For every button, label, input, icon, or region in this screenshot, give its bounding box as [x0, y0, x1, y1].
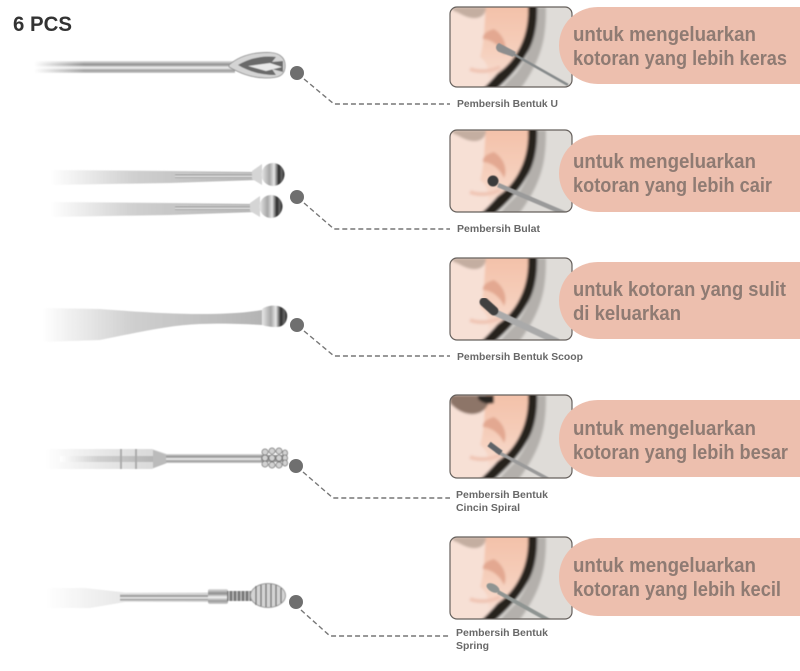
label: [456, 490, 548, 514]
label: [456, 628, 548, 652]
callout text: untuk mengeluarkan: [573, 151, 756, 173]
callout text: untuk mengeluarkan: [573, 24, 756, 46]
tool: spring tip: [45, 584, 286, 608]
callout text line 2: kotoran yang lebih cair: [573, 175, 772, 197]
tool: round tips pair: [50, 163, 284, 218]
callout text: untuk mengeluarkan: [573, 555, 756, 577]
callout pill: [559, 262, 800, 339]
callout pill: [559, 538, 800, 616]
title: 6 PCS: [13, 13, 72, 36]
row 1: U-shaped cleaner: [34, 3, 800, 110]
marker dot: [289, 595, 303, 609]
label: Cincin Spiral: [456, 503, 520, 514]
label: Pembersih Bentuk Scoop: [457, 352, 583, 363]
callout text line 2: kotoran yang lebih kecil: [573, 579, 781, 601]
marker dot: [290, 190, 304, 204]
row 2: round cleaner: [50, 126, 800, 235]
row 3: scoop cleaner: [42, 254, 800, 363]
tool: spiral ring tip: [45, 448, 288, 469]
tool: U-shaped tip: [34, 52, 285, 78]
leader line: [304, 203, 450, 229]
marker dot: [290, 66, 304, 80]
tool: scoop tip: [42, 306, 287, 342]
row 5: spring cleaner: [45, 533, 800, 652]
leader line: [304, 331, 450, 356]
callout pill: [559, 7, 800, 84]
ear photo: [449, 257, 573, 341]
ear photo: [449, 536, 573, 620]
marker dot: [289, 459, 303, 473]
label: Pembersih Bulat: [457, 224, 541, 235]
label: Pembersih Bentuk: [456, 628, 548, 639]
callout text: untuk mengeluarkan: [573, 418, 756, 440]
leader line: [304, 79, 450, 104]
row 4: spiral ring cleaner: [45, 391, 800, 514]
callout pill: [559, 135, 800, 212]
leader line: [303, 472, 450, 498]
label: Spring: [456, 641, 489, 652]
callout pill: [559, 400, 800, 477]
marker dot: [290, 318, 304, 332]
label: Pembersih Bentuk: [456, 490, 548, 501]
ear photo: [449, 129, 573, 213]
ear photo: [449, 394, 573, 479]
ear photo: [449, 6, 573, 88]
leader line: [301, 610, 450, 636]
callout text line 2: di keluarkan: [573, 303, 681, 325]
label: Pembersih Bentuk U: [457, 99, 558, 110]
callout text: untuk kotoran yang sulit: [573, 279, 786, 301]
